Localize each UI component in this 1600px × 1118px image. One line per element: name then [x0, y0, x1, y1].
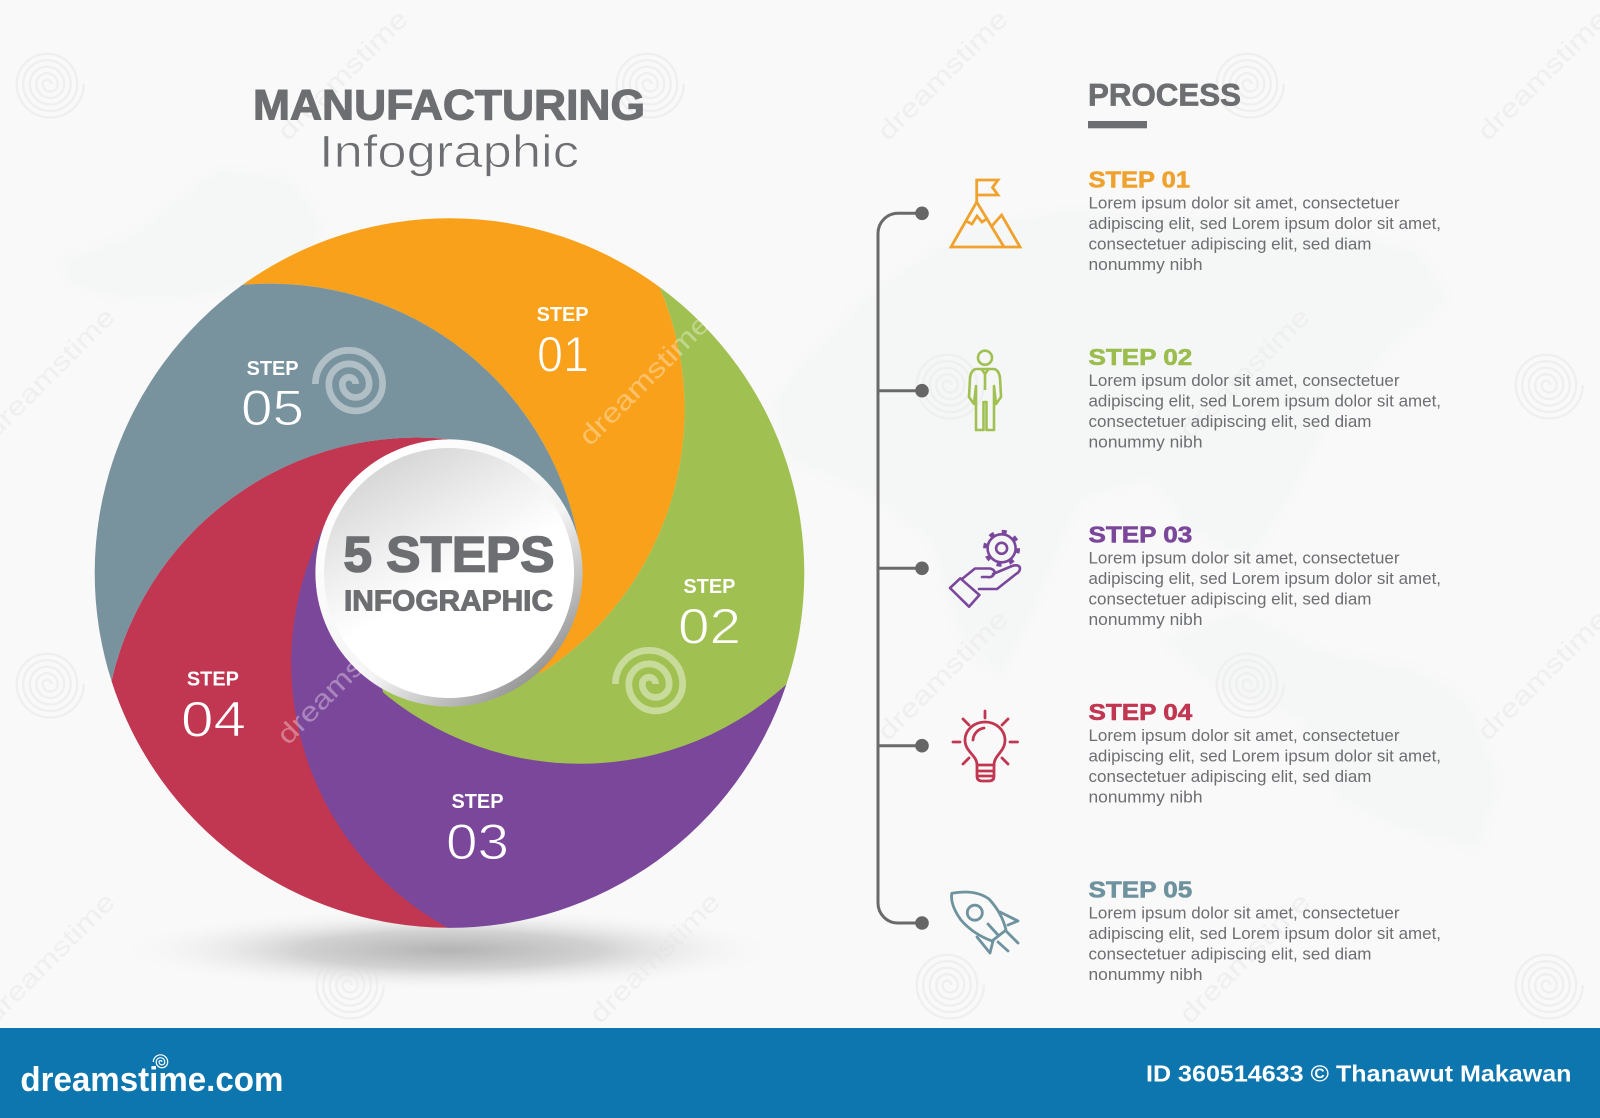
panel: step 03: adipiscing elit, sed Lorem ipsum dolor sit amet,	[1088, 569, 1441, 588]
title: MANUFACTURING	[253, 82, 645, 130]
footer bar	[0, 1028, 1600, 1118]
wheel watermark text	[271, 308, 716, 750]
center text: 5 STEPS	[344, 527, 554, 583]
watermark text: dreamstime	[871, 603, 1014, 746]
center disc	[315, 439, 583, 707]
panel: step 01: consectetuer adipiscing elit, sed diam	[1088, 234, 1372, 253]
timeline connector	[878, 206, 929, 930]
segment: step 03 purple	[189, 355, 826, 998]
wheel label: step 04: 04	[181, 691, 246, 747]
panel: step 04: nonummy nibh	[1088, 787, 1202, 806]
center text: INFOGRAPHIC	[344, 586, 553, 618]
panel: step 05: consectetuer adipiscing elit, sed diam	[1088, 944, 1372, 963]
panel: step 01	[1088, 166, 1441, 274]
segment: step 01 orange	[242, 218, 685, 693]
wheel label: step 04	[181, 668, 246, 747]
panel: step 02: STEP 02	[1088, 344, 1192, 370]
watermark text: dreamstime	[583, 886, 726, 1029]
wheel label: step 02: 02	[678, 599, 741, 655]
icon: business person	[969, 351, 1001, 430]
wheel label: step 03	[446, 791, 509, 870]
wheel watermark text: dreamstime	[271, 607, 414, 750]
watermark text: dreamstime	[871, 3, 1014, 146]
watermark text: dreamstime	[271, 3, 414, 146]
center text	[344, 527, 554, 618]
icon: mountain with flag	[951, 180, 1020, 247]
wheel label: step 03: 03	[446, 814, 509, 870]
panel: step 02: nonummy nibh	[1088, 432, 1202, 451]
wheel label: step 01	[537, 304, 589, 383]
footer credit: ID 360514633 © Thanawut Makawan	[1146, 1061, 1572, 1087]
footer logo: dreamstime.com	[20, 1061, 283, 1099]
title: Infographic	[319, 126, 579, 177]
watermark text: dreamstime	[1471, 3, 1600, 146]
panel: step 05	[1088, 876, 1441, 984]
panel: step 04: consectetuer adipiscing elit, sed diam	[1088, 767, 1372, 786]
wheel label: step 05: STEP	[247, 358, 299, 380]
wheel label: step 01: 01	[537, 327, 589, 383]
panel: step 01: adipiscing elit, sed Lorem ipsum dolor sit amet,	[1088, 214, 1441, 233]
wheel label: step 04: STEP	[187, 668, 239, 690]
title	[253, 82, 645, 177]
panel: step 03: STEP 03	[1088, 521, 1192, 547]
panel: step 05: STEP 05	[1088, 876, 1192, 902]
segment: step 04 red	[51, 338, 687, 982]
panel: step 03: nonummy nibh	[1088, 610, 1202, 629]
wheel label: step 02	[678, 576, 741, 655]
segment edge: green bulge	[353, 539, 795, 835]
panel: step 02: adipiscing elit, sed Lorem ipsum dolor sit amet,	[1088, 391, 1441, 410]
panel: step 04: Lorem ipsum dolor sit amet, consectetuer	[1088, 726, 1400, 745]
panel: step 04: adipiscing elit, sed Lorem ipsum dolor sit amet,	[1088, 746, 1441, 765]
wheel label: step 03: STEP	[452, 791, 504, 813]
wheel watermark text: dreamstime	[573, 308, 716, 451]
panel: step 02	[1088, 344, 1441, 451]
panel: step 05: adipiscing elit, sed Lorem ipsum dolor sit amet,	[1088, 924, 1441, 943]
panel: step 02: consectetuer adipiscing elit, sed diam	[1088, 412, 1372, 431]
segment: step 05 gray	[48, 240, 636, 807]
panel: step 01: nonummy nibh	[1088, 255, 1202, 274]
panel: step 01: Lorem ipsum dolor sit amet, consectetuer	[1088, 193, 1400, 212]
process heading	[1088, 77, 1241, 128]
segment: step 02 green	[272, 266, 860, 834]
icon: rocket	[952, 892, 1018, 953]
wheel shadow	[114, 908, 784, 992]
segment edge: purple bulge	[186, 510, 571, 945]
watermark text: dreamstime	[1471, 603, 1600, 746]
watermark text: dreamstime	[1173, 301, 1316, 444]
icon: light bulb	[953, 711, 1018, 781]
panel: step 04: STEP 04	[1088, 699, 1192, 725]
icon: hand holding gear	[950, 532, 1020, 607]
panel: step 05: Lorem ipsum dolor sit amet, consectetuer	[1088, 903, 1400, 922]
panel: step 02: Lorem ipsum dolor sit amet, consectetuer	[1088, 371, 1400, 390]
panel: step 03	[1088, 521, 1441, 629]
panel: step 01: STEP 01	[1088, 166, 1190, 192]
watermark text: dreamstime	[1173, 886, 1316, 1029]
wheel label: step 05	[241, 358, 304, 436]
wheel label: step 02: STEP	[683, 576, 735, 598]
wheel label: step 01: STEP	[537, 304, 589, 326]
faint world map	[60, 170, 1500, 850]
process heading: PROCESS	[1088, 77, 1241, 113]
wheel label: step 05: 05	[241, 380, 304, 436]
panel: step 03: consectetuer adipiscing elit, sed diam	[1088, 589, 1372, 608]
wheel watermark spirals	[315, 350, 683, 711]
panel: step 04	[1088, 699, 1441, 806]
panel: step 05: nonummy nibh	[1088, 965, 1202, 984]
panel: step 03: Lorem ipsum dolor sit amet, consectetuer	[1088, 548, 1400, 567]
five step spiral wheel	[48, 218, 860, 998]
